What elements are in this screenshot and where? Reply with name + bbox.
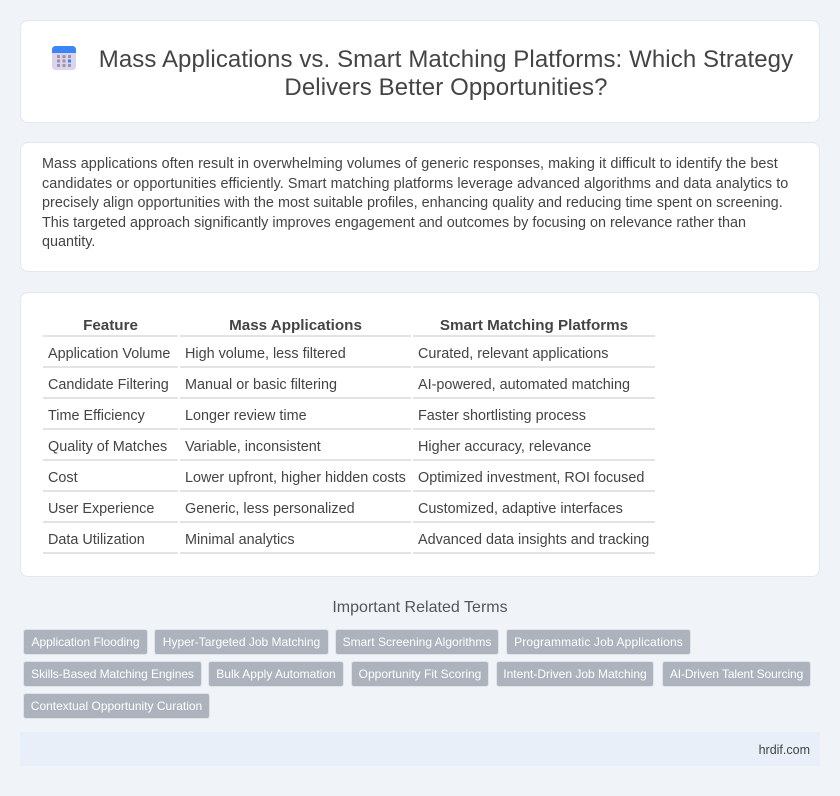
tag: Opportunity Fit Scoring: [359, 667, 481, 681]
comparison table: Quality of Matches: [48, 438, 167, 454]
comparison table: Manual or basic filtering: [185, 376, 337, 392]
comparison table: Customized, adaptive interfaces: [418, 500, 623, 516]
title: Mass Applications vs. Smart Matching Platforms: Which Strategy: [99, 46, 793, 73]
comparison table: Data Utilization: [48, 532, 145, 548]
tag: Application Flooding: [31, 635, 140, 649]
footer: [20, 732, 820, 766]
comparison table: User Experience: [48, 500, 154, 516]
tag: Intent-Driven Job Matching: [503, 667, 647, 681]
heading: related terms: Important Related Terms: [332, 599, 508, 616]
intro text: quantity.: [42, 234, 95, 250]
tag: Smart Screening Algorithms: [343, 635, 491, 649]
tag: [208, 661, 344, 687]
tag: [23, 693, 210, 719]
tag: AI-Driven Talent Sourcing: [670, 667, 803, 681]
tag: Hyper-Targeted Job Matching: [163, 635, 320, 649]
comparison table: Faster shortlisting process: [418, 408, 586, 424]
intro text: Mass applications often result in overwhelming volumes of generic responses, making it difficult to identify the best: [42, 156, 778, 172]
comparison table: Optimized investment, ROI focused: [418, 470, 644, 486]
comparison table: Mass Applications: [229, 317, 362, 334]
tag: [496, 661, 654, 687]
tag: Contextual Opportunity Curation: [31, 699, 202, 713]
comparison table: AI-powered, automated matching: [418, 376, 630, 392]
comparison table: Feature: [83, 317, 138, 334]
comparison table: Lower upfront, higher hidden costs: [185, 470, 406, 486]
tag: [662, 661, 811, 687]
intro text: precisely align opportunities with the most suitable profiles, enhancing quality and reducing time spent on screening.: [42, 195, 783, 211]
footer source: hrdif.com: [759, 743, 810, 757]
comparison table: Minimal analytics: [185, 532, 295, 548]
intro text: This targeted approach significantly improves engagement and outcomes by focusing on relevance rather than: [42, 214, 746, 230]
comparison table: Candidate Filtering: [48, 376, 169, 392]
panel: title header: [20, 20, 820, 123]
tag: [23, 661, 202, 687]
tag: [506, 629, 691, 655]
title: [99, 46, 793, 101]
tag: [154, 629, 329, 655]
comparison table: Higher accuracy, relevance: [418, 438, 591, 454]
tag: [351, 661, 489, 687]
tag: [23, 629, 148, 655]
icon: calendar: [52, 46, 76, 70]
comparison table: Variable, inconsistent: [185, 438, 321, 454]
comparison table: Advanced data insights and tracking: [418, 532, 649, 548]
intro text: [42, 156, 788, 250]
comparison table: Curated, relevant applications: [418, 346, 608, 362]
comparison table: Smart Matching Platforms: [440, 317, 628, 334]
comparison table: [43, 317, 655, 554]
comparison table: Longer review time: [185, 408, 307, 424]
related term tags: [23, 629, 811, 719]
comparison table: Application Volume: [48, 346, 170, 362]
comparison table: Generic, less personalized: [185, 500, 355, 516]
tag: Programmatic Job Applications: [514, 635, 683, 649]
comparison table: High volume, less filtered: [185, 346, 346, 362]
tag: Skills-Based Matching Engines: [31, 667, 194, 681]
tag: [335, 629, 499, 655]
comparison table: Cost: [48, 470, 78, 486]
panel: comparison table: [20, 292, 820, 577]
panel: introduction: [20, 142, 820, 272]
intro text: candidates or opportunities efficiently. Smart matching platforms leverage advanced algorithms and data analytics to: [42, 176, 788, 192]
tag: Bulk Apply Automation: [216, 667, 336, 681]
comparison table: Time Efficiency: [48, 408, 145, 424]
title: Delivers Better Opportunities?: [284, 74, 608, 101]
